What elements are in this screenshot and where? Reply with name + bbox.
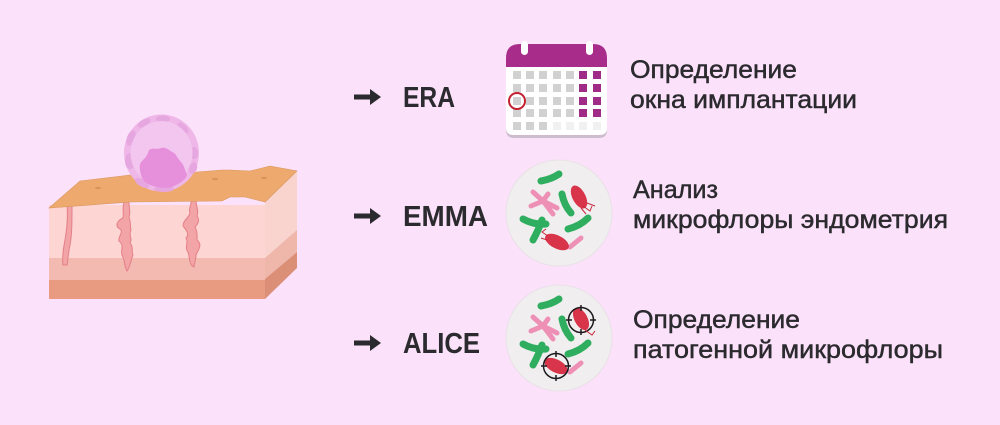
embryo <box>124 114 199 192</box>
arrow <box>354 208 381 224</box>
target: upper pathogen <box>566 305 596 335</box>
label: EMMA: EMMA <box>403 201 488 233</box>
row: ALICE <box>354 285 943 391</box>
row: ERA: окна имплантации <box>630 86 857 114</box>
arrow <box>354 335 381 351</box>
row: EMMA <box>354 160 948 266</box>
glands <box>63 200 200 271</box>
arrow <box>354 89 381 105</box>
icon: calendar <box>506 41 607 138</box>
row: EMMA: микрофлоры эндометрия <box>633 206 948 234</box>
epithelium surface <box>49 166 297 208</box>
text: implantation window: Определение <box>630 56 797 84</box>
target: lower pathogen <box>541 351 571 381</box>
illustration: endometrium with embryo <box>49 114 297 299</box>
text: pathogenic microflora detection: Определение <box>633 306 800 334</box>
icon: microflora dish <box>506 160 612 266</box>
row: ERA <box>354 41 857 138</box>
row: ALICE: патогенной микрофлоры <box>633 336 943 364</box>
label: ERA: ERA <box>403 82 455 114</box>
label: ALICE: ALICE <box>403 328 480 360</box>
icon: pathogen dish <box>506 285 612 391</box>
tissue block layers <box>49 171 297 299</box>
text: endometrial microflora analysis: Анализ <box>633 176 718 204</box>
